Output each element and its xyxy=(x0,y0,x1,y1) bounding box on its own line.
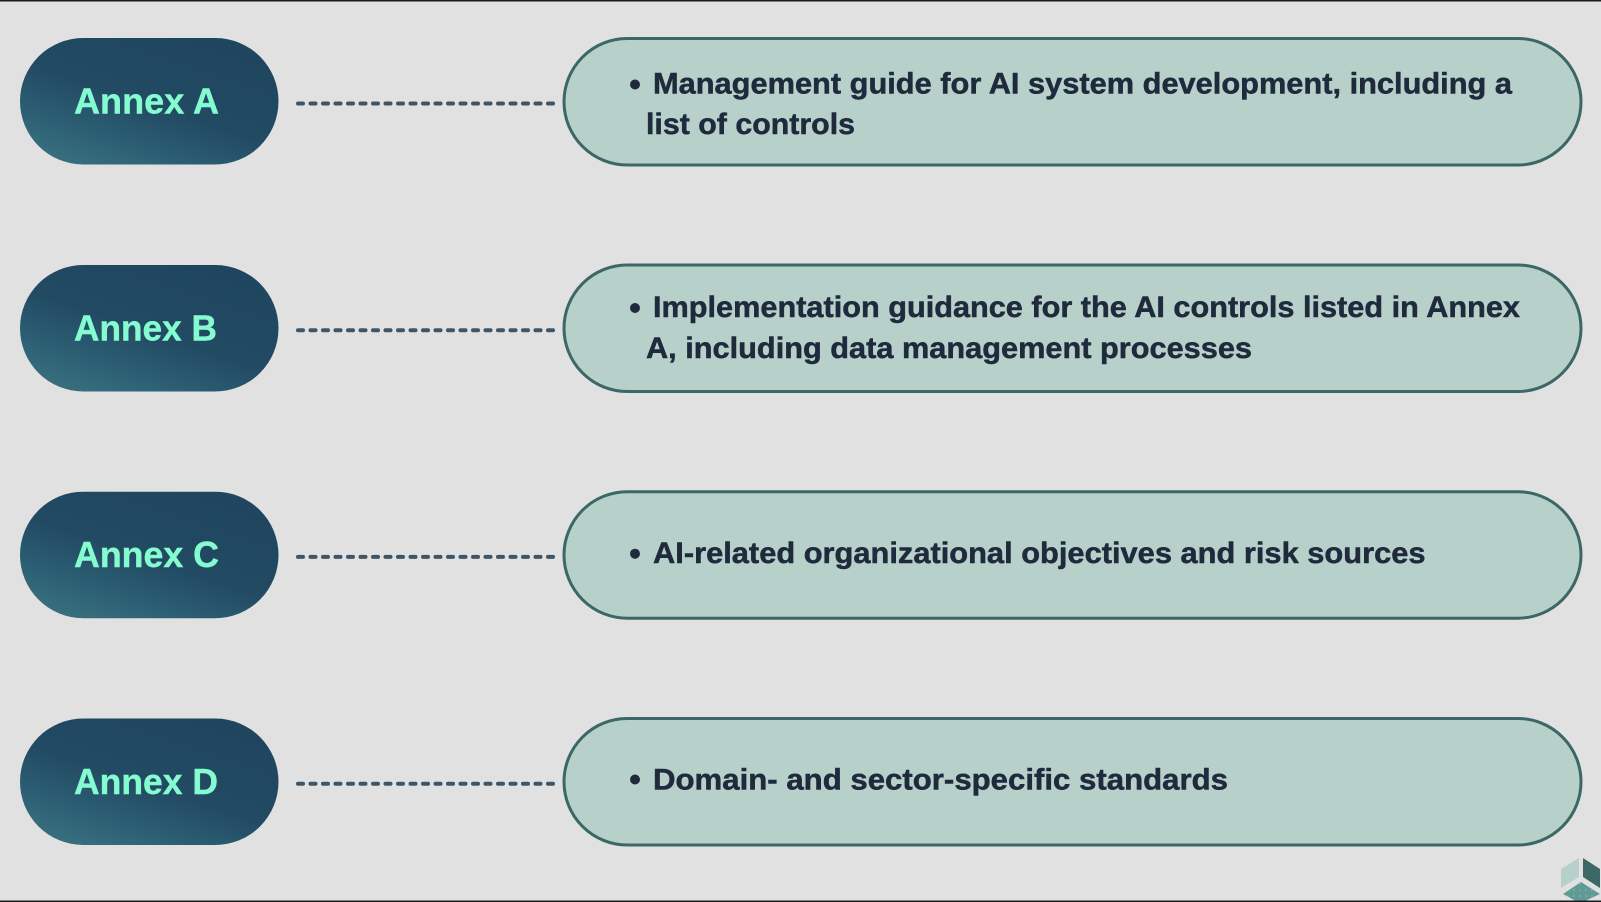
dashed connector B xyxy=(298,328,554,332)
icon: cube logo xyxy=(1561,858,1600,900)
row: Annex A xyxy=(20,38,1581,165)
dashed connector C xyxy=(298,555,554,559)
row: Annex C xyxy=(20,492,1581,618)
dashed connector A xyxy=(298,102,554,106)
pill: Annex B xyxy=(20,265,278,392)
row: Annex D xyxy=(20,718,1581,845)
pill: Annex C: Annex C xyxy=(74,534,219,575)
description box A: Management guide for AI system development, including a xyxy=(653,67,1512,100)
description box B xyxy=(564,265,1581,392)
description box D xyxy=(564,718,1581,845)
description box C xyxy=(564,492,1581,618)
description box D: Domain- and sector-specific standards xyxy=(653,764,1228,796)
pill: Annex A xyxy=(20,38,278,164)
pill: Annex D: Annex D xyxy=(74,761,218,802)
row: Annex B xyxy=(20,265,1581,392)
pill: Annex C xyxy=(20,492,278,618)
pill: Annex D xyxy=(20,718,278,845)
pill: Annex A: Annex A xyxy=(74,80,219,121)
dashed connector D xyxy=(298,782,554,786)
description box B: Implementation guidance for the AI controls listed in Annex xyxy=(653,291,1520,324)
description box A xyxy=(564,38,1581,165)
description box A: list of controls xyxy=(646,108,855,141)
pill: Annex B: Annex B xyxy=(74,307,217,348)
description box B: A, including data management processes xyxy=(646,332,1252,365)
description box C: AI-related organizational objectives and risk sources xyxy=(653,537,1426,570)
